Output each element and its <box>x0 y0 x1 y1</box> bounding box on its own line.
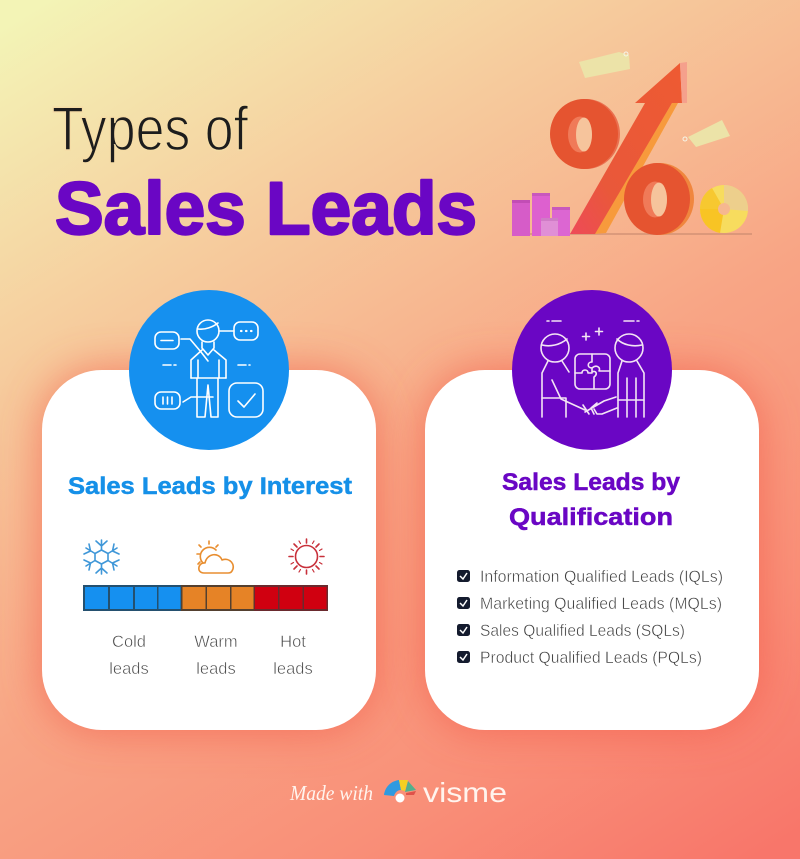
title line: Types of: Types of <box>52 95 249 164</box>
segmented interest bar <box>83 585 328 611</box>
icon: sun <box>289 539 324 574</box>
title <box>52 95 477 250</box>
warm segments <box>181 585 254 611</box>
illustration: percent sign with rising arrow <box>512 52 752 236</box>
checklist <box>457 568 723 667</box>
label: hot leads: leads <box>273 660 313 678</box>
card shadow <box>42 370 376 730</box>
percent top circle <box>550 99 620 169</box>
percent bottom circle <box>624 163 694 235</box>
card <box>42 370 376 730</box>
card <box>425 370 759 730</box>
heading: sales leads by qualification <box>502 469 680 531</box>
label: warm leads: leads <box>196 660 236 678</box>
panel: sales leads by qualification <box>425 290 759 730</box>
footer: made with visme <box>289 777 507 808</box>
label: hot leads: Hot <box>280 633 306 651</box>
arrow <box>570 63 682 234</box>
icon: handshake and puzzle <box>512 290 672 450</box>
icon: sun behind cloud <box>197 541 233 573</box>
item: MQLs: Marketing Qualified Leads (MQLs) <box>480 595 722 613</box>
icon: snowflake <box>84 540 119 574</box>
label: warm leads: Warm <box>194 633 238 651</box>
heading: sales leads by interest: Sales Leads by Interest <box>68 473 352 500</box>
label: cold leads <box>109 633 149 678</box>
arrow head side <box>680 62 687 103</box>
ground shadow <box>512 233 752 235</box>
panel: sales leads by interest <box>42 290 376 730</box>
arrow side <box>594 103 678 234</box>
item: PQLs: Product Qualified Leads (PQLs) <box>480 649 702 667</box>
price tag top <box>579 52 630 78</box>
title line: Sales Leads: Sales Leads <box>55 167 477 250</box>
icon: visme logo <box>384 780 416 802</box>
made with text: Made with <box>289 781 373 805</box>
heading: sales leads by qualification: Qualification <box>509 504 673 531</box>
icon: person with options <box>129 290 289 450</box>
bar chart <box>512 193 570 236</box>
donut chart <box>700 185 748 233</box>
label: warm leads <box>194 633 238 678</box>
label: cold leads: Cold <box>112 633 146 651</box>
heading: sales leads by qualification: Sales Leads by <box>502 469 680 496</box>
hot segments <box>254 585 328 611</box>
cold segments <box>83 585 182 611</box>
label: cold leads: leads <box>109 660 149 678</box>
item: IQLs: Information Qualified Leads (IQLs) <box>480 568 723 586</box>
item: SQLs: Sales Qualified Leads (SQLs) <box>480 622 685 640</box>
label: hot leads <box>273 633 313 678</box>
card shadow <box>425 370 759 730</box>
price tag right <box>683 120 730 147</box>
visme wordmark: visme <box>423 777 507 808</box>
